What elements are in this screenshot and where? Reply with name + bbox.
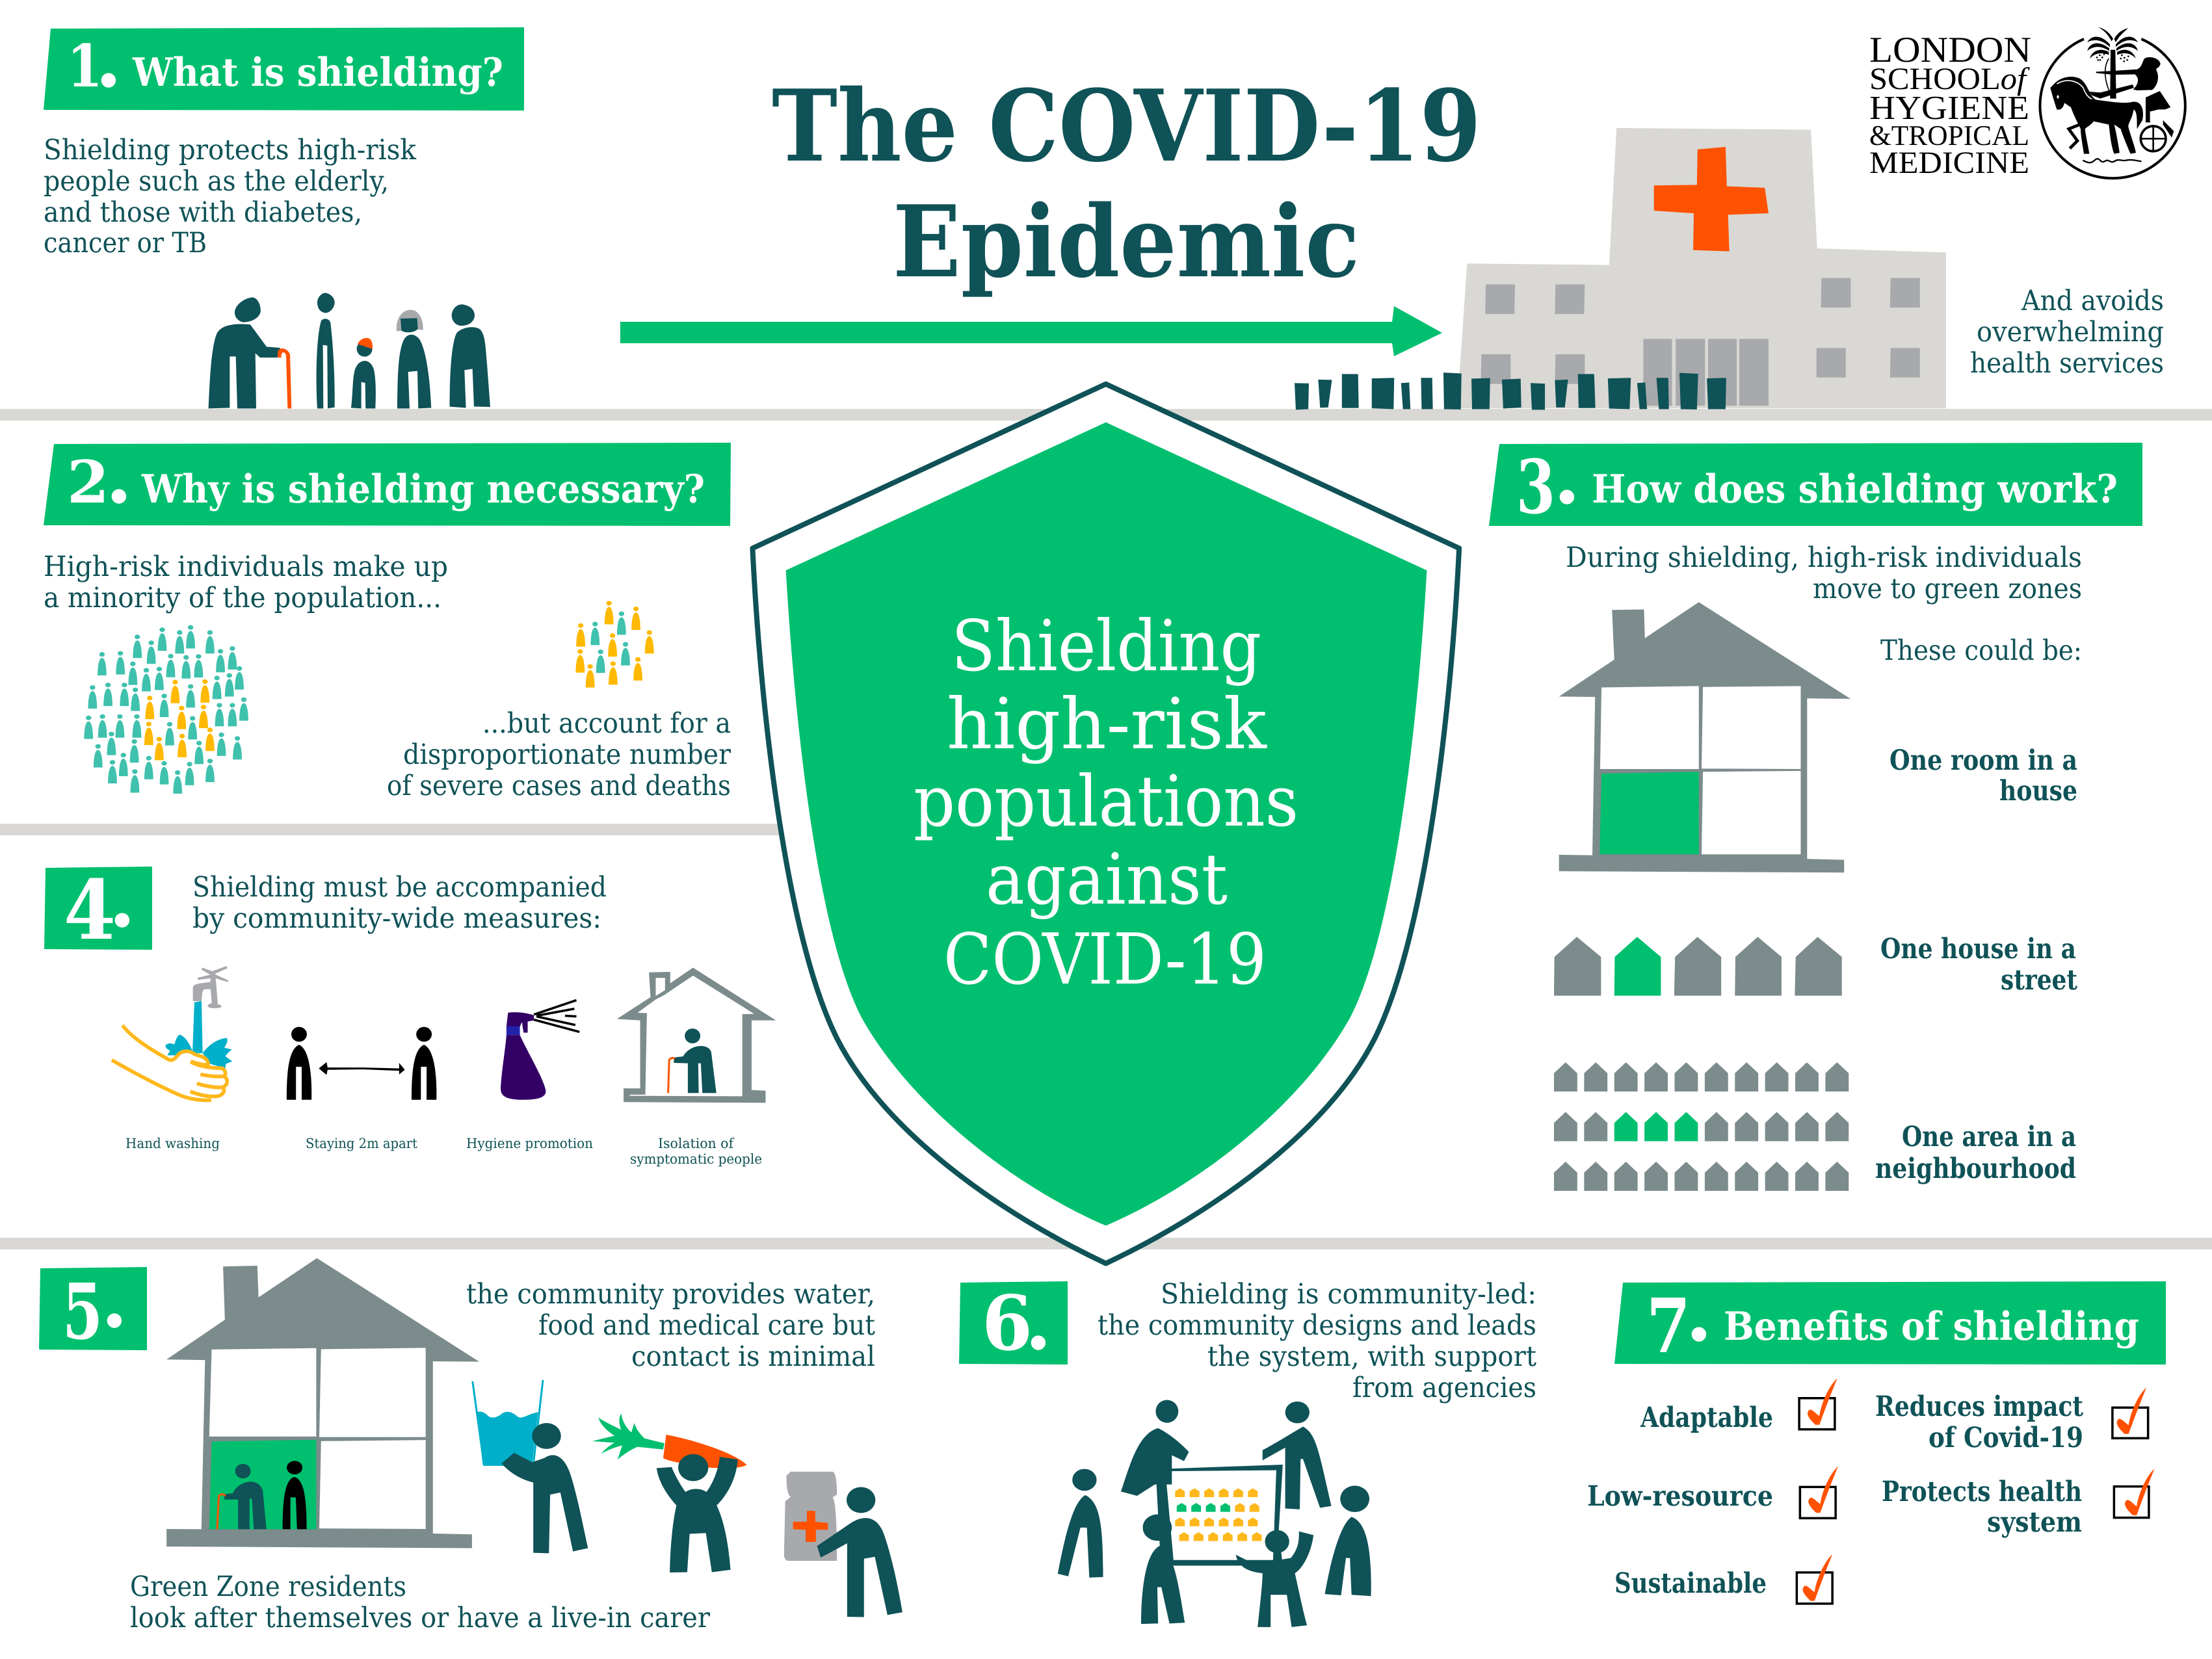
panel: 3 how does shielding work — [1489, 430, 2142, 1191]
heading 7: . — [1685, 1268, 1713, 1359]
shield text: populations — [914, 761, 1298, 843]
label: one house: One house in a — [1880, 933, 2076, 965]
text: avoids overwhelming — [1970, 285, 2164, 380]
pictogram: whole population cluster — [84, 625, 248, 794]
benefit labels — [1587, 1391, 2083, 1600]
heading 3: How does shielding work? — [1592, 467, 2118, 512]
title: Epidemic — [893, 183, 1360, 300]
labels: measures: Staying 2m apart — [306, 1136, 418, 1151]
heading 7: 7 — [1646, 1283, 1691, 1370]
panel: 6 community-led — [959, 1276, 1536, 1627]
heading 1: . — [95, 14, 122, 105]
logo seal: horse and chariot — [2040, 27, 2185, 178]
label: one house — [1880, 933, 2077, 997]
icon: person with water glass — [473, 1380, 588, 1553]
icon: hospital with queue — [1295, 128, 1946, 410]
icon: community planning around board — [1058, 1400, 1371, 1627]
labels: measures: Hygiene promotion — [466, 1136, 593, 1151]
panel: 1 what is shielding — [44, 14, 524, 408]
shield text — [914, 606, 1298, 1000]
labels: measures — [125, 1136, 762, 1167]
heading 3 — [1489, 430, 2142, 530]
shield text: high-risk — [947, 684, 1268, 765]
shield text: COVID-19 — [943, 919, 1267, 1000]
text: green zones intro — [1566, 542, 2082, 667]
benefit labels: Low-resource — [1587, 1480, 1773, 1513]
text: community provides: contact is minimal — [631, 1340, 875, 1373]
heading 1: 1 — [67, 32, 103, 101]
text: green zone residents: look after themselves or have a live-in carer — [130, 1602, 710, 1634]
icon: high-risk people group — [209, 293, 490, 408]
text: green zone residents: Green Zone residents — [130, 1571, 406, 1603]
text: green zones intro: During shielding, high-risk individuals — [1566, 542, 2082, 574]
benefit labels: system — [1987, 1506, 2082, 1539]
text: community provides: the community provides water, — [466, 1278, 875, 1311]
icon: person with carrot — [592, 1413, 746, 1573]
icon: person with medicine bottle — [784, 1472, 902, 1617]
icon: staying 2m apart — [287, 1027, 436, 1100]
heading 1 — [44, 14, 524, 111]
text: community-led: Shielding is community-led: — [1161, 1278, 1536, 1311]
label: one area — [1875, 1121, 2076, 1185]
title — [772, 68, 1481, 300]
panel: 5 community provides — [39, 1254, 902, 1634]
label: one house: street — [2001, 964, 2077, 997]
icon: street of houses — [1554, 937, 1842, 996]
title: The COVID-19 — [772, 68, 1481, 184]
panel: 4 community-wide measures — [44, 854, 776, 1167]
heading 2: . — [105, 430, 133, 521]
labels: measures: symptomatic people — [630, 1151, 762, 1167]
panel: 2 why is shielding necessary — [44, 430, 731, 802]
heading 2 — [44, 430, 731, 526]
text: avoids overwhelming: And avoids — [2021, 285, 2164, 317]
text: avoids overwhelming: overwhelming — [1977, 316, 2164, 348]
text: community-led: from agencies — [1352, 1372, 1536, 1404]
number badge 5: 5 — [62, 1266, 103, 1357]
arrow: shielding to hospital — [620, 306, 1442, 356]
logo text: LSHTM: SCHOOLof — [1869, 62, 2030, 96]
text: green zone residents — [130, 1571, 710, 1634]
text: community-led: the system, with support — [1207, 1340, 1536, 1373]
benefit labels: of Covid-19 — [1929, 1422, 2083, 1454]
logo text: LSHTM: MEDICINE — [1869, 146, 2029, 180]
icon: neighbourhood of houses — [1554, 1062, 1849, 1191]
logo text: LSHTM: &TROPICAL — [1869, 120, 2029, 151]
benefit labels: Protects health — [1882, 1476, 2082, 1508]
text: disproportionate number: disproportionate number — [403, 738, 731, 771]
icon: spray bottle — [501, 1000, 579, 1100]
text: green zones intro: These could be: — [1880, 634, 2082, 667]
icon: house with green room — [1559, 602, 1850, 872]
text: avoids overwhelming: health services — [1970, 347, 2164, 380]
panel: 7 benefits of shielding — [1587, 1268, 2166, 1604]
text: disproportionate number: of severe cases and deaths — [387, 770, 731, 802]
text: minority of population: High-risk individuals make up — [44, 551, 448, 583]
heading 7: Benefits of shielding — [1724, 1304, 2139, 1350]
benefit labels: Sustainable — [1614, 1567, 1767, 1600]
label: one area: neighbourhood — [1875, 1153, 2076, 1185]
text: community provides: food and medical care but — [538, 1309, 875, 1342]
label: one room: house — [1999, 775, 2077, 807]
icon: hand washing — [112, 966, 232, 1100]
labels: measures: Isolation of — [658, 1136, 735, 1151]
number badge 6: 6 — [982, 1279, 1033, 1368]
text: shielding definition — [44, 134, 417, 259]
icons: check boxes — [1797, 1378, 2155, 1604]
number badge 5: . — [101, 1254, 128, 1346]
pictogram: severe cases cluster — [575, 601, 654, 688]
text: community provides — [466, 1278, 875, 1373]
number badge 6: . — [1025, 1276, 1052, 1368]
heading 2: Why is shielding necessary? — [141, 467, 705, 512]
logo text: LSHTM — [1869, 30, 2031, 180]
heading 2: 2 — [67, 448, 109, 517]
label: one room: One room in a — [1889, 744, 2077, 777]
text: minority of population — [44, 551, 448, 614]
icon: house with residents in green room — [166, 1258, 479, 1548]
number badge 4: . — [109, 854, 136, 945]
text: green zones intro: move to green zones — [1813, 573, 2082, 605]
text: community-led: the community designs and leads — [1098, 1309, 1536, 1342]
shield text: against — [986, 839, 1228, 921]
shield text: Shielding — [951, 606, 1261, 687]
number badge 5 — [39, 1254, 147, 1357]
label: one area: One area in a — [1902, 1121, 2076, 1153]
heading 1: What is shielding? — [132, 50, 503, 96]
benefit labels: Adaptable — [1640, 1402, 1773, 1434]
text: shielding definition: people such as the elderly, — [44, 165, 389, 198]
text: minority of population: a minority of the population... — [44, 582, 441, 614]
heading 3: 3 — [1516, 443, 1555, 530]
panel: central shield — [752, 384, 1459, 1263]
benefit labels: Reduces impact — [1875, 1391, 2083, 1423]
logo text: LSHTM: HYGIENE — [1869, 90, 2029, 127]
heading 7 — [1614, 1268, 2166, 1370]
number badge 4: 4 — [64, 862, 116, 958]
logo text: LSHTM: LONDON — [1869, 30, 2031, 70]
text: disproportionate number — [387, 707, 731, 802]
text: shielding definition: cancer or TB — [44, 227, 207, 259]
text: shielding definition: and those with diabetes, — [44, 196, 362, 229]
text: community measures intro: by community-wide measures: — [192, 902, 601, 935]
text: disproportionate number: ...but account for a — [482, 707, 731, 740]
label: one room — [1889, 744, 2077, 807]
text: shielding definition: Shielding protects high-risk — [44, 134, 417, 166]
text: community measures intro — [192, 871, 607, 935]
number badge 6 — [959, 1276, 1068, 1368]
icon: isolation house — [617, 968, 776, 1103]
labels: measures: Hand washing — [125, 1136, 220, 1151]
shield outline — [752, 384, 1459, 1263]
number badge 4 — [44, 854, 152, 958]
text: community measures intro: Shielding must be accompanied — [192, 871, 607, 904]
text: community-led — [1098, 1278, 1536, 1404]
heading 3: . — [1553, 430, 1581, 522]
